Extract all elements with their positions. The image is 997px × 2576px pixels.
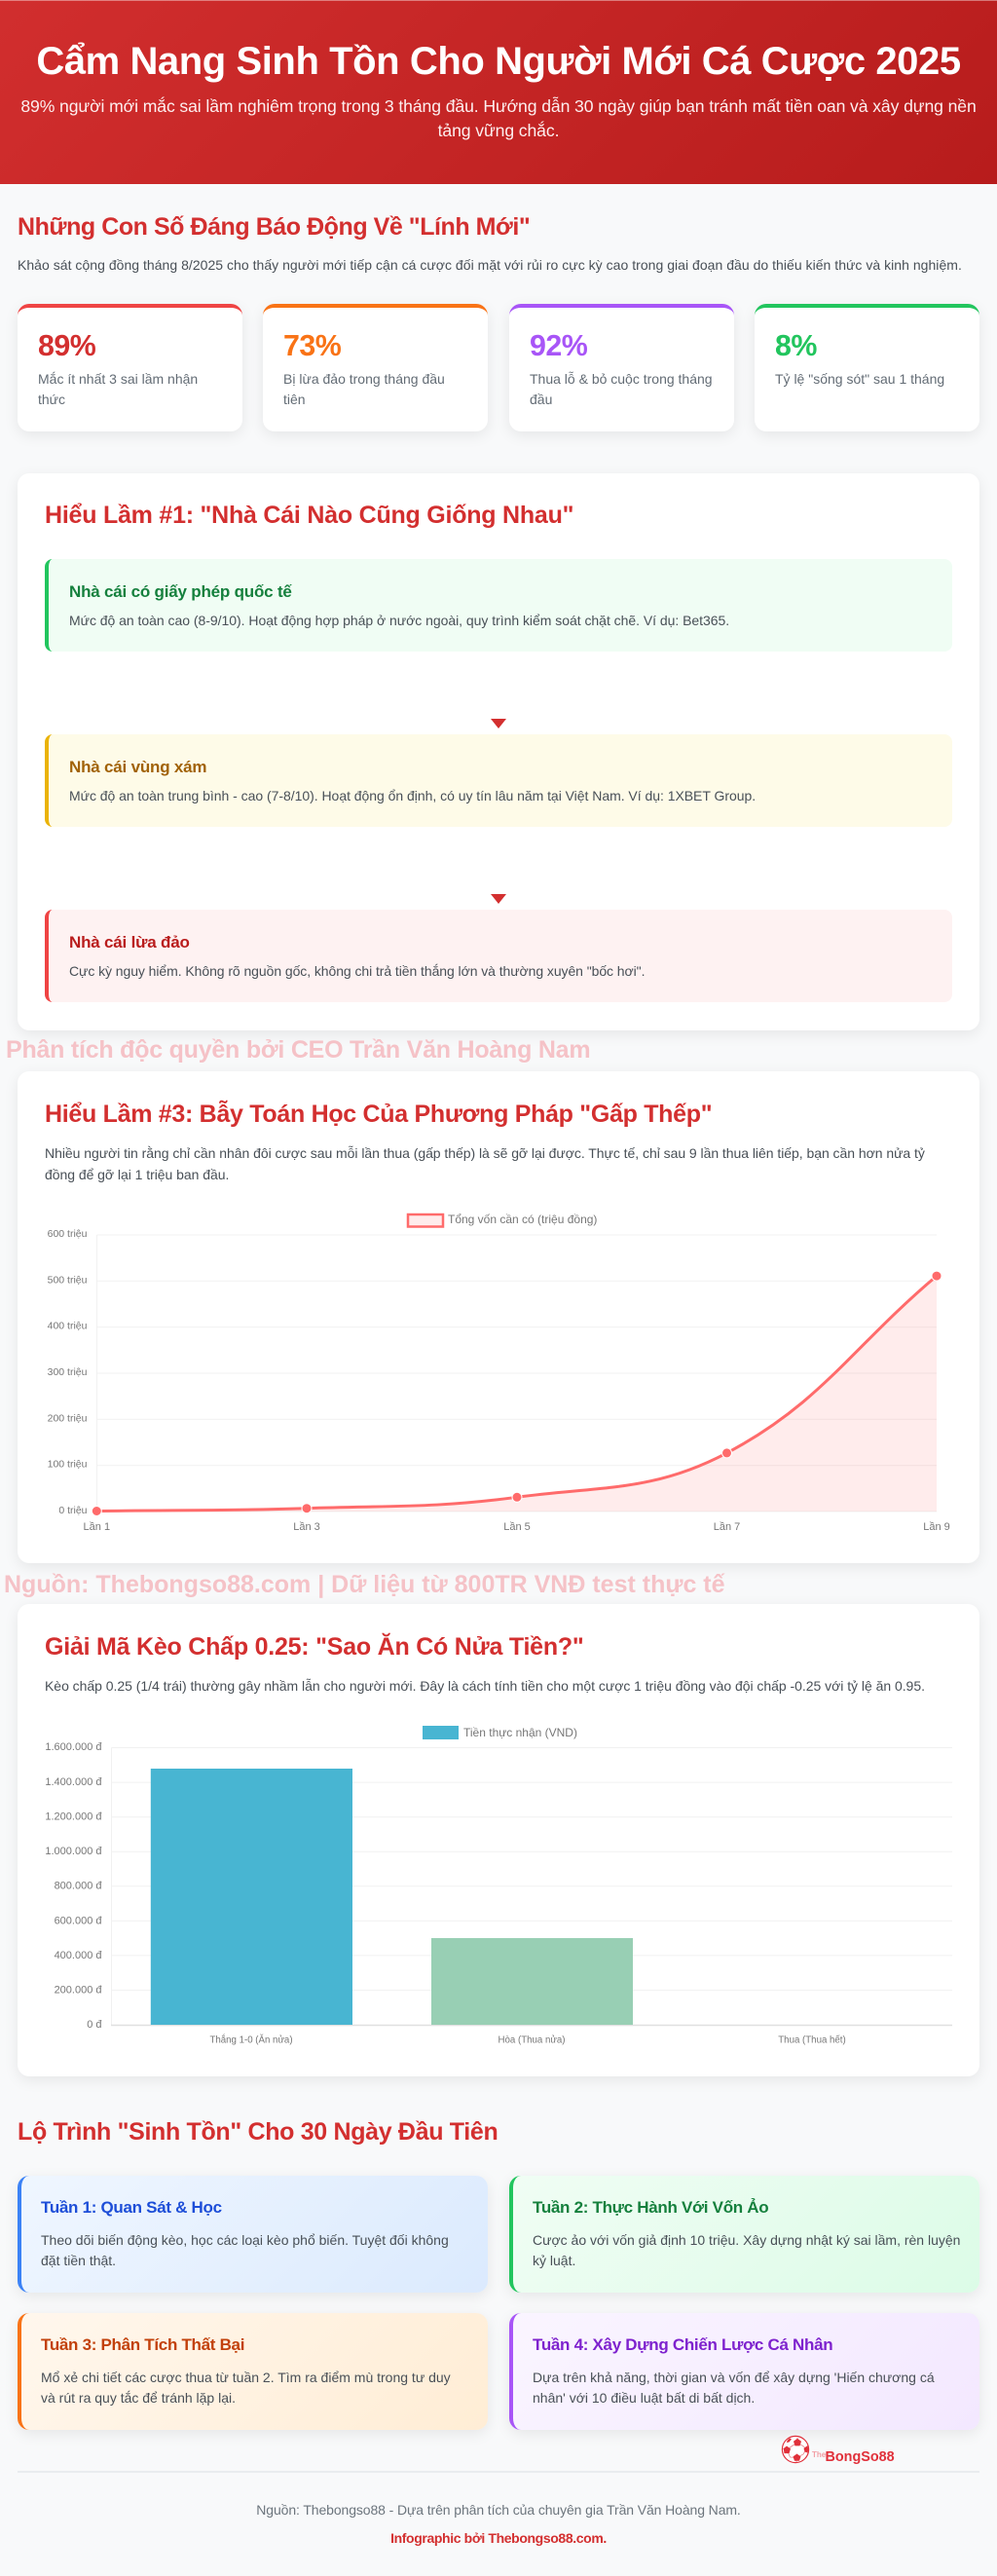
arrow — [491, 719, 506, 728]
stat card: 8% — [755, 304, 979, 431]
footer credit: Infographic bởi Thebongso88.com. — [390, 2530, 607, 2546]
stat label: Thua lỗ & bỏ cuộc trong tháng — [530, 371, 713, 387]
stat card: 89% — [18, 304, 242, 431]
roadmap card: week 1 — [18, 2176, 488, 2293]
bar: win — [151, 1769, 352, 2025]
x axis labels: Lần 9 — [923, 1521, 950, 1533]
card text: Dựa trên khả năng, thời gian và vốn để xây dựng 'Hiến chương cá — [533, 2370, 935, 2385]
grid lines — [111, 1747, 952, 2025]
y axis labels — [45, 1741, 102, 2031]
card title: Tuần 3: Phân Tích Thất Bại — [41, 2335, 244, 2354]
y axis labels: 800.000 đ — [55, 1881, 102, 1892]
y axis labels: 0 đ — [87, 2019, 102, 2031]
stat value: 92% — [530, 329, 587, 362]
panel description — [45, 1145, 925, 1182]
stat label: thức — [38, 392, 65, 407]
stat label: Tỷ lệ "sống sót" sau 1 tháng — [775, 371, 944, 387]
card text — [533, 2232, 960, 2268]
section heading: alarming numbers: Những Con Số Đáng Báo Động Về "Lính Mới" — [18, 213, 530, 241]
logo text: BongSo88 — [826, 2449, 895, 2465]
card text: kỷ luật. — [533, 2253, 575, 2268]
data points — [92, 1271, 942, 1515]
roadmap card: week 4 — [509, 2313, 979, 2430]
x axis labels: Lần 1 — [84, 1521, 110, 1533]
box: grey-zone bookmakers — [45, 734, 952, 827]
box text: Mức độ an toàn cao (8-9/10). Hoạt động hợp pháp ở nước ngoài, quy trình kiểm soát chặt chẽ. Ví dụ: Bet365. — [69, 613, 729, 628]
y axis labels: 1.000.000 đ — [45, 1846, 102, 1857]
watermark: source: Nguồn: Thebongso88.com | Dữ liệu từ 800TR VNĐ test thực tế — [4, 1571, 725, 1598]
box text: Mức độ an toàn trung bình - cao (7-8/10). Hoạt động ổn định, có uy tín lâu năm tại Việt Nam. Ví dụ: 1XBET Group. — [69, 788, 756, 803]
stat value: 8% — [775, 329, 817, 362]
panel: misconception 1 — [18, 473, 979, 1030]
card text: đặt tiền thật. — [41, 2253, 116, 2268]
card text: Theo dõi biến động kèo, học các loại kèo phổ biến. Tuyệt đối không — [41, 2232, 449, 2248]
box: scam bookmakers — [45, 910, 952, 1002]
x axis labels: Lần 7 — [714, 1521, 740, 1533]
stat value: 89% — [38, 329, 95, 362]
card title: Tuần 4: Xây Dựng Chiến Lược Cá Nhân — [533, 2335, 832, 2354]
subtitle — [20, 96, 977, 140]
card text — [533, 2370, 935, 2406]
x axis labels — [209, 2035, 846, 2045]
box: licensed bookmakers — [45, 559, 952, 652]
box title: Nhà cái có giấy phép quốc tế — [69, 582, 292, 601]
stat label: tiên — [283, 392, 306, 407]
line chart: martingale capital — [47, 1213, 950, 1533]
x axis labels: Thắng 1-0 (Ăn nửa) — [209, 2035, 293, 2045]
panel heading: Hiểu Lầm #1: "Nhà Cái Nào Cũng Giống Nhau" — [45, 502, 573, 529]
panel description: Kèo chấp 0.25 (1/4 trái) thường gây nhầm lẫn cho người mới. Đây là cách tính tiền cho một cược 1 triệu đồng vào đội chấp -0.25 với tỷ lệ ăn 0.95. — [45, 1678, 925, 1694]
stat label — [283, 371, 445, 407]
y axis labels: 1.200.000 đ — [45, 1811, 102, 1823]
card text: nhân' với 10 điều luật bất di bất dịch. — [533, 2390, 755, 2406]
arrow — [491, 894, 506, 904]
stat label: Mắc ít nhất 3 sai lầm nhận — [38, 371, 198, 387]
stat label — [38, 371, 198, 407]
card text — [41, 2232, 449, 2268]
y axis labels: 300 triệu — [48, 1366, 88, 1378]
grid lines — [97, 1235, 937, 1512]
x axis labels: Hòa (Thua nửa) — [498, 2035, 565, 2045]
panel description: đồng để gỡ lại 1 triệu ban đầu. — [45, 1167, 229, 1182]
card text: Mổ xẻ chi tiết các cược thua từ tuần 2. Tìm ra điểm mù trong tư duy — [41, 2370, 451, 2385]
y axis labels: 600 triệu — [48, 1228, 88, 1240]
panel heading: Hiểu Lầm #3: Bẫy Toán Học Của Phương Pháp "Gấp Thếp" — [45, 1101, 712, 1128]
y axis labels: 400.000 đ — [55, 1950, 102, 1961]
subtitle: tảng vững chắc. — [438, 121, 559, 140]
roadmap card: week 3 — [18, 2313, 488, 2430]
card title: Tuần 2: Thực Hành Với Vốn Ảo — [533, 2198, 768, 2217]
stat label: Bị lừa đảo trong tháng đầu — [283, 371, 445, 387]
panel: AH 0.25 — [18, 1604, 979, 2076]
panel heading: Giải Mã Kèo Chấp 0.25: "Sao Ăn Có Nửa Tiền?" — [45, 1633, 584, 1661]
y axis labels: 400 triệu — [48, 1321, 88, 1332]
box title: Nhà cái vùng xám — [69, 758, 206, 776]
y axis labels: 500 triệu — [48, 1274, 88, 1286]
y axis labels: 1.600.000 đ — [45, 1741, 102, 1753]
header banner — [0, 0, 997, 184]
logo: TheBongSo88 — [781, 2435, 895, 2465]
panel description: Nhiều người tin rằng chỉ cần nhân đôi cược sau mỗi lần thua (gấp thếp) là sẽ gỡ lại được. Thực tế, chỉ sau 9 lần thua liên tiếp, bạn cần hơn nửa tỷ — [45, 1145, 925, 1161]
legend: Tổng vốn cần có (triệu đồng) — [448, 1213, 597, 1226]
watermark: CEO analysis: Phân tích độc quyền bởi CEO Trần Văn Hoàng Nam — [6, 1036, 590, 1064]
card title: Tuần 1: Quan Sát & Học — [41, 2198, 222, 2217]
x axis labels — [84, 1521, 950, 1533]
subtitle: 89% người mới mắc sai lầm nghiêm trọng trong 3 tháng đầu. Hướng dẫn 30 ngày giúp bạn tránh mất tiền oan và xây dựng nền — [20, 96, 977, 116]
box title: Nhà cái lừa đảo — [69, 933, 190, 952]
y axis labels: 0 triệu — [58, 1505, 88, 1516]
stat card: 92% — [509, 304, 734, 431]
card text — [41, 2370, 451, 2406]
y axis labels: 600.000 đ — [55, 1915, 102, 1926]
roadmap card: week 2 — [509, 2176, 979, 2293]
footer divider — [18, 2471, 979, 2473]
stat value: 73% — [283, 329, 341, 362]
bar: draw — [431, 1938, 633, 2025]
card text: Cược ảo với vốn giả định 10 triệu. Xây dựng nhật ký sai lầm, rèn luyện — [533, 2232, 960, 2248]
icon: football — [782, 2436, 809, 2463]
stat label — [530, 371, 713, 407]
box text: Cực kỳ nguy hiểm. Không rõ nguồn gốc, không chi trả tiền thắng lớn và thường xuyên "bốc hơi". — [69, 963, 645, 979]
y axis labels: 1.400.000 đ — [45, 1776, 102, 1788]
y axis labels: 200.000 đ — [55, 1984, 102, 1996]
area under curve — [96, 1276, 937, 1512]
bar chart: payout — [45, 1726, 952, 2045]
stat label: đầu — [530, 392, 552, 407]
section description: Khảo sát cộng đồng tháng 8/2025 cho thấy người mới tiếp cận cá cược đối mặt với rủi ro cực kỳ cao trong giai đoạn đầu do thiếu kiến thức và kinh nghiệm. — [18, 257, 962, 273]
y axis labels: 100 triệu — [48, 1459, 88, 1471]
stat card: 73% — [263, 304, 488, 431]
section heading: roadmap: Lộ Trình "Sinh Tồn" Cho 30 Ngày Đầu Tiên — [18, 2118, 498, 2146]
x axis labels: Lần 5 — [503, 1521, 531, 1533]
x axis labels: Lần 3 — [293, 1521, 320, 1533]
panel: misconception 3 — [18, 1071, 979, 1563]
footer source: Nguồn: Thebongso88 - Dựa trên phân tích của chuyên gia Trần Văn Hoàng Nam. — [256, 2502, 741, 2518]
logo text: The — [812, 2450, 827, 2459]
y axis labels: 200 triệu — [48, 1412, 88, 1424]
legend: Tiền thực nhận (VND) — [463, 1726, 577, 1739]
x axis labels: Thua (Thua hết) — [778, 2035, 846, 2045]
baseline — [111, 2024, 952, 2026]
card text: và rút ra quy tắc để tránh lặp lại. — [41, 2390, 236, 2406]
title: Cẩm Nang Sinh Tồn Cho Người Mới Cá Cược 2025 — [36, 40, 961, 83]
y axis labels — [48, 1228, 88, 1516]
curve line — [96, 1276, 937, 1512]
